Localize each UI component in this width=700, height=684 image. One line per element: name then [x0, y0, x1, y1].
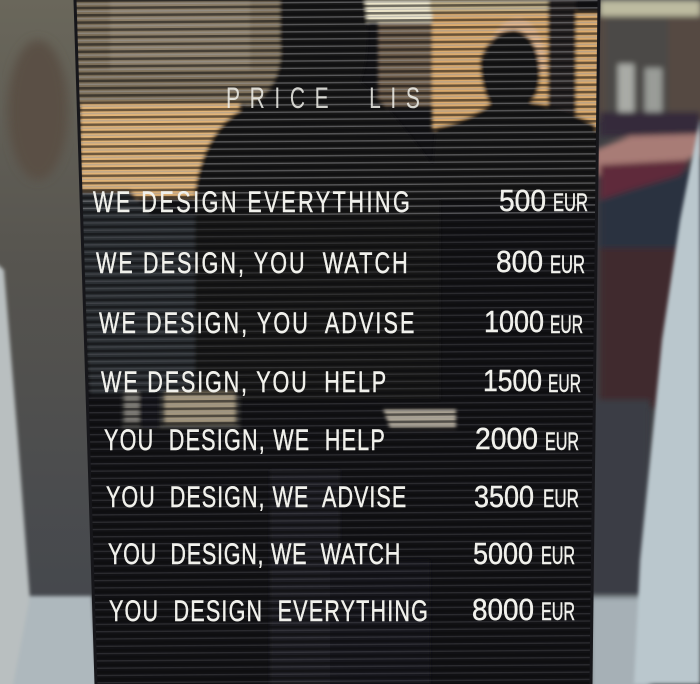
- row 8: 8000: [472, 592, 534, 627]
- row 5: [104, 421, 579, 457]
- row 2: WE DESIGN, YOU WATCH: [96, 245, 408, 280]
- heading: PRICE LIS: [226, 83, 420, 115]
- row 8: EUR: [541, 598, 575, 626]
- price list lettering: [93, 83, 588, 628]
- row 6: EUR: [543, 485, 579, 513]
- board frame edges: [75, 0, 599, 684]
- row 4: EUR: [548, 370, 581, 398]
- row 1: [93, 183, 588, 219]
- row 7: EUR: [541, 542, 575, 570]
- row 4: [101, 363, 581, 399]
- row 2: [96, 244, 585, 280]
- row 3: 1000: [484, 304, 544, 339]
- row 3: [99, 304, 583, 340]
- left light wall and floor: [0, 262, 98, 684]
- row 5: EUR: [545, 428, 579, 456]
- row 4: WE DESIGN, YOU HELP: [101, 364, 386, 399]
- slats: [76, 0, 598, 680]
- row 2: 800: [496, 244, 543, 279]
- row 8: YOU DESIGN EVERYTHING: [109, 593, 428, 628]
- row 2: EUR: [550, 251, 585, 279]
- row 1: WE DESIGN EVERYTHING: [93, 184, 410, 219]
- row 5: YOU DESIGN, WE HELP: [104, 422, 385, 457]
- left reflection wall: [0, 0, 100, 600]
- row 6: YOU DESIGN, WE ADVISE: [106, 479, 406, 514]
- row 4: 1500: [483, 363, 542, 398]
- row 3: EUR: [550, 311, 583, 339]
- row 6: [106, 479, 579, 514]
- reflection: buildings and figures: [60, 0, 602, 684]
- row 8: [109, 592, 575, 628]
- row 1: 500: [499, 183, 546, 218]
- row 7: 5000: [473, 536, 533, 571]
- row 7: YOU DESIGN, WE WATCH: [108, 536, 400, 571]
- right light wall: [634, 118, 700, 684]
- row 6: 3500: [474, 479, 534, 514]
- row 3: WE DESIGN, YOU ADVISE: [99, 305, 414, 340]
- row 1: EUR: [553, 189, 588, 217]
- letter board with reflected scene: [76, 0, 598, 684]
- right reflection: window, awning and red car: [590, 0, 700, 684]
- row 5: 2000: [475, 421, 538, 456]
- row 7: [108, 536, 575, 571]
